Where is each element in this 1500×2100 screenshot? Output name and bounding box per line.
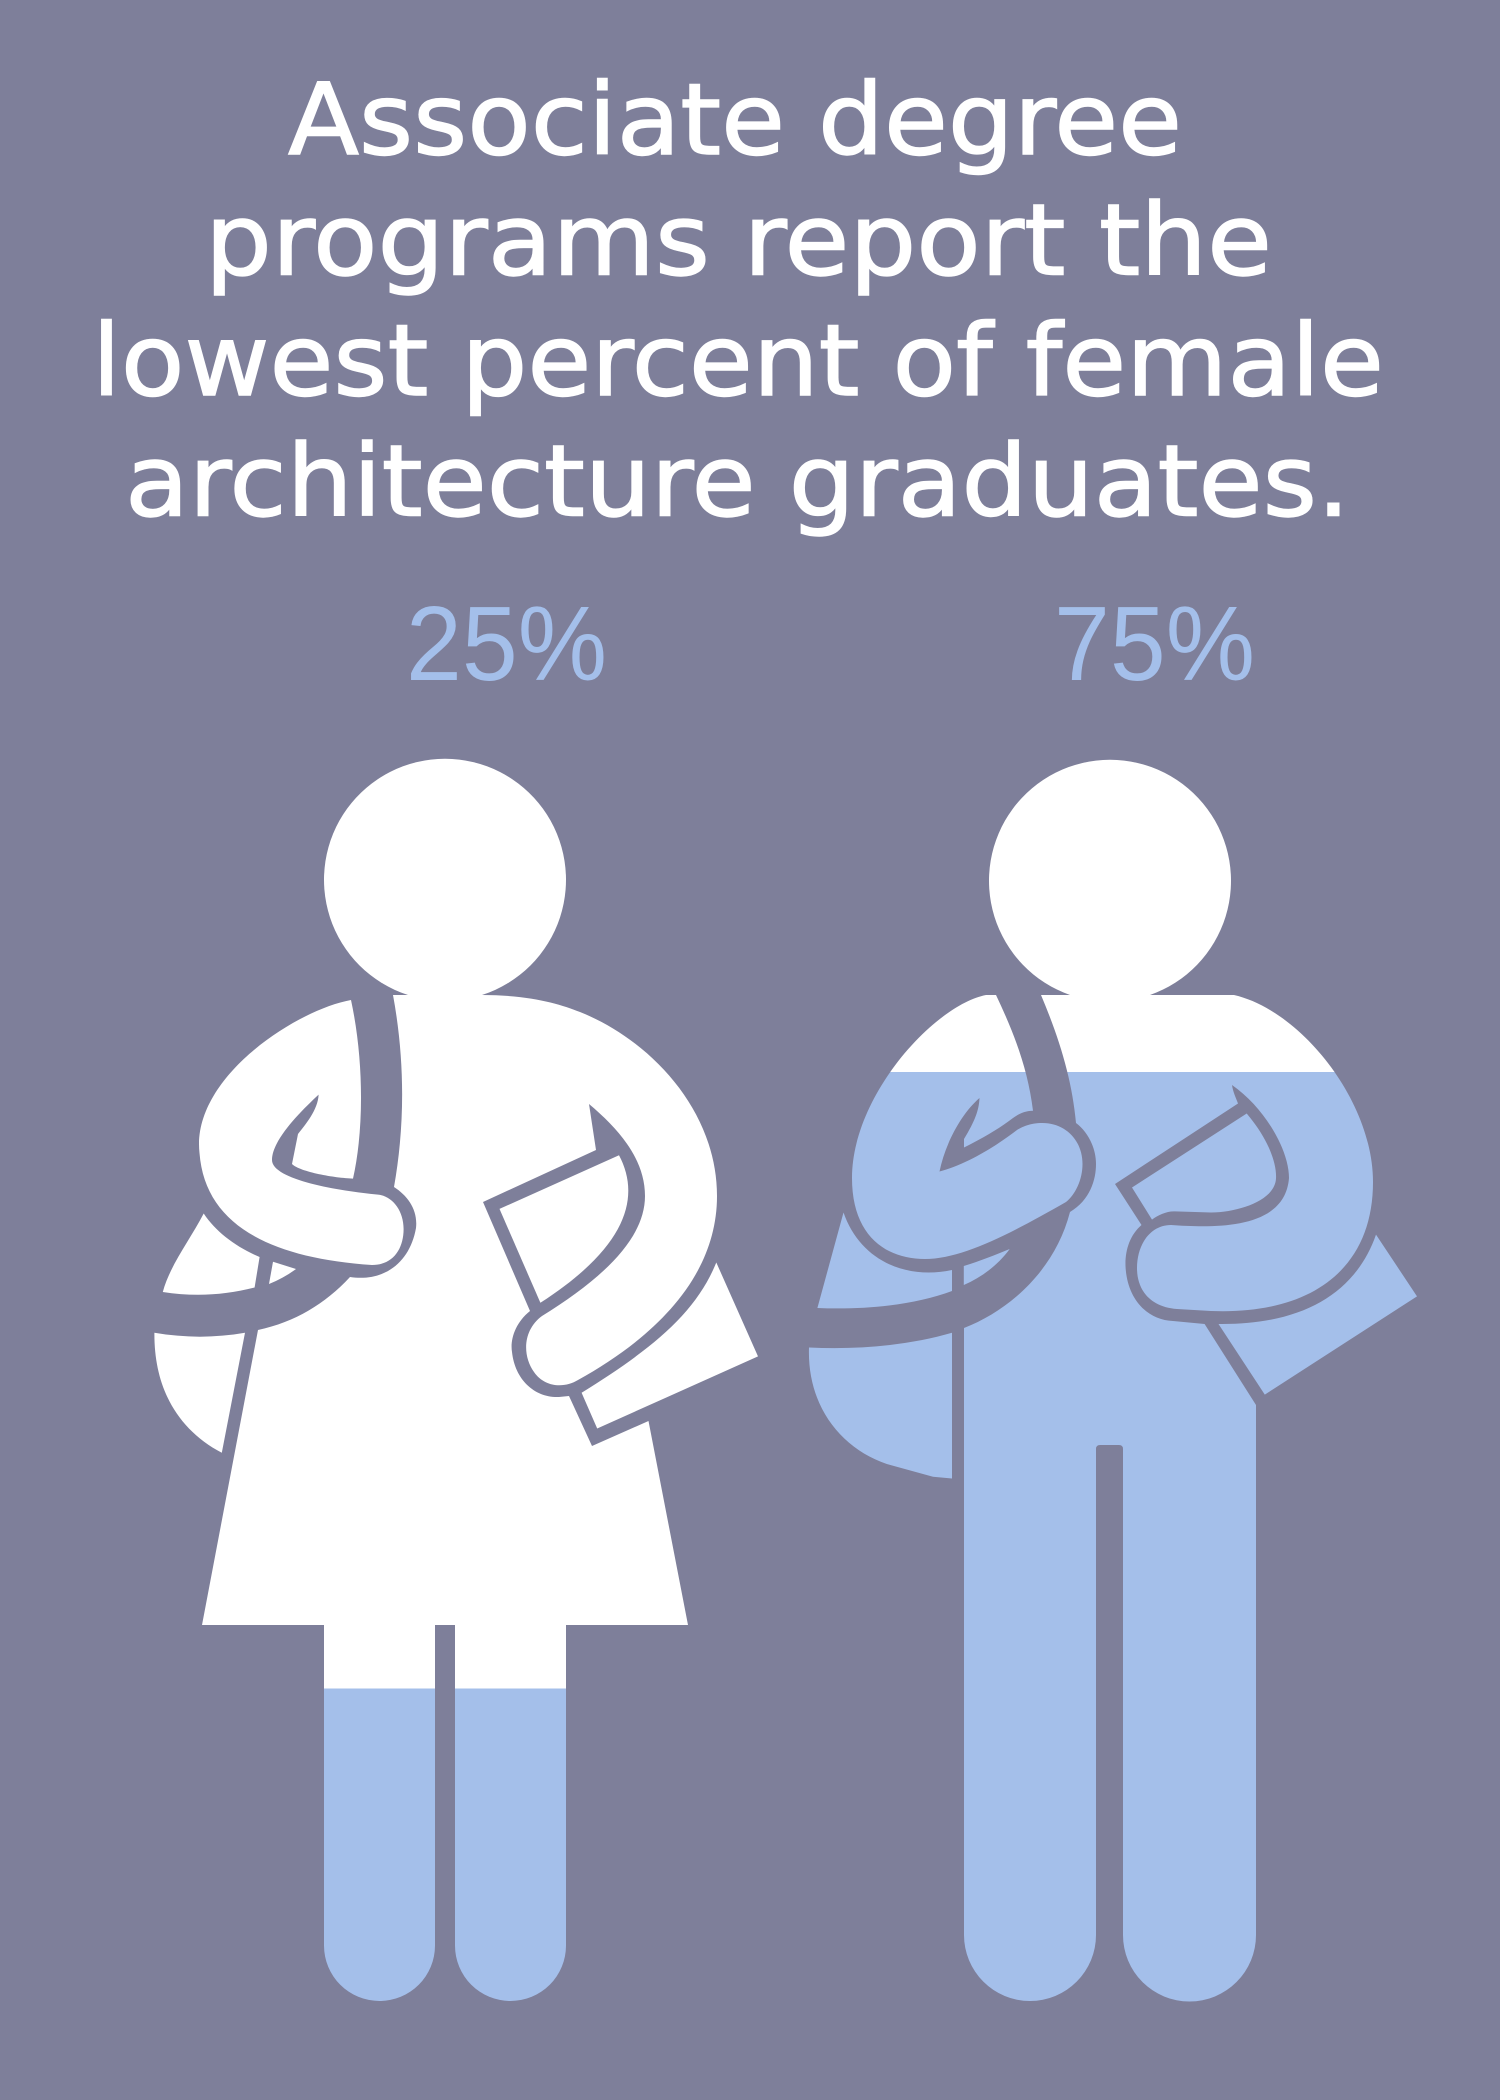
title: programs report the — [205, 184, 1272, 298]
percentage: 25%: 25% — [406, 585, 607, 703]
right leg — [455, 1625, 566, 2001]
percentage: 75%: 75% — [1054, 585, 1255, 703]
title: lowest percent of female — [92, 304, 1384, 419]
figure: female student, 25% filled — [154, 759, 758, 2001]
left leg — [324, 1625, 435, 2001]
backpack — [154, 1214, 296, 1453]
backpack — [809, 1212, 1010, 1478]
figure: male student, 75% filled — [809, 760, 1417, 2002]
book — [1132, 1114, 1417, 1395]
head — [989, 760, 1231, 995]
left arm — [199, 1000, 404, 1265]
title: Associate degree — [288, 63, 1182, 178]
head — [324, 759, 566, 995]
title — [92, 63, 1384, 540]
dress and right arm — [202, 995, 717, 1625]
book — [500, 1155, 758, 1428]
body, right arm and legs — [964, 995, 1373, 2002]
title: architecture graduates. — [125, 424, 1350, 540]
left arm — [852, 995, 1082, 1259]
